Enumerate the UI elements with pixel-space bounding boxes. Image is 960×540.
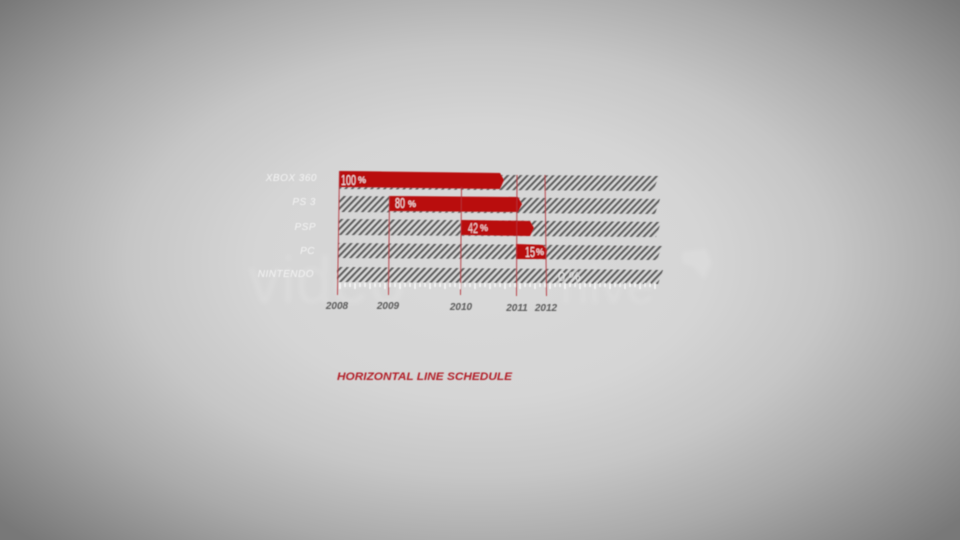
red bar: PS 3: % xyxy=(408,199,416,209)
watermark: hive xyxy=(560,257,655,315)
red bar: PC xyxy=(516,244,547,261)
row labels: PSP xyxy=(294,222,316,233)
red bar: PSP xyxy=(461,220,534,237)
year labels: 2010 xyxy=(449,302,473,313)
year labels: 2008 xyxy=(325,301,349,312)
red bar: PC: % xyxy=(536,247,544,257)
chart xyxy=(258,171,663,314)
red bar: XBOX 360 xyxy=(339,171,504,189)
year labels xyxy=(325,301,558,314)
red bar: PS 3 xyxy=(389,195,522,212)
year gridlines xyxy=(338,171,546,296)
hatched row tracks xyxy=(337,174,663,284)
red bar: PSP: 42 xyxy=(468,220,478,237)
row labels: XBOX 360 xyxy=(265,173,317,184)
year labels: 2012 xyxy=(534,303,558,314)
year labels: 2009 xyxy=(376,301,400,312)
row labels xyxy=(258,173,317,280)
red bar: PSP: % xyxy=(480,223,488,233)
red bar: XBOX 360: % xyxy=(358,175,366,185)
red bar: XBOX 360: 100 xyxy=(341,172,356,189)
red bar: PS 3: 80 xyxy=(395,195,405,212)
red bar: PC: 15 xyxy=(525,244,535,261)
row labels: PC xyxy=(300,246,315,257)
faint value: NINTENDO: 0 % xyxy=(558,269,581,284)
row labels: NINTENDO xyxy=(258,269,314,280)
title: HORIZONTAL LINE SCHEDULE xyxy=(337,371,513,383)
watermark: video xyxy=(248,243,406,317)
year labels: 2011 xyxy=(505,303,528,314)
watermark xyxy=(248,243,712,317)
row labels: PS 3 xyxy=(292,197,316,208)
white tick ruler xyxy=(340,283,655,289)
